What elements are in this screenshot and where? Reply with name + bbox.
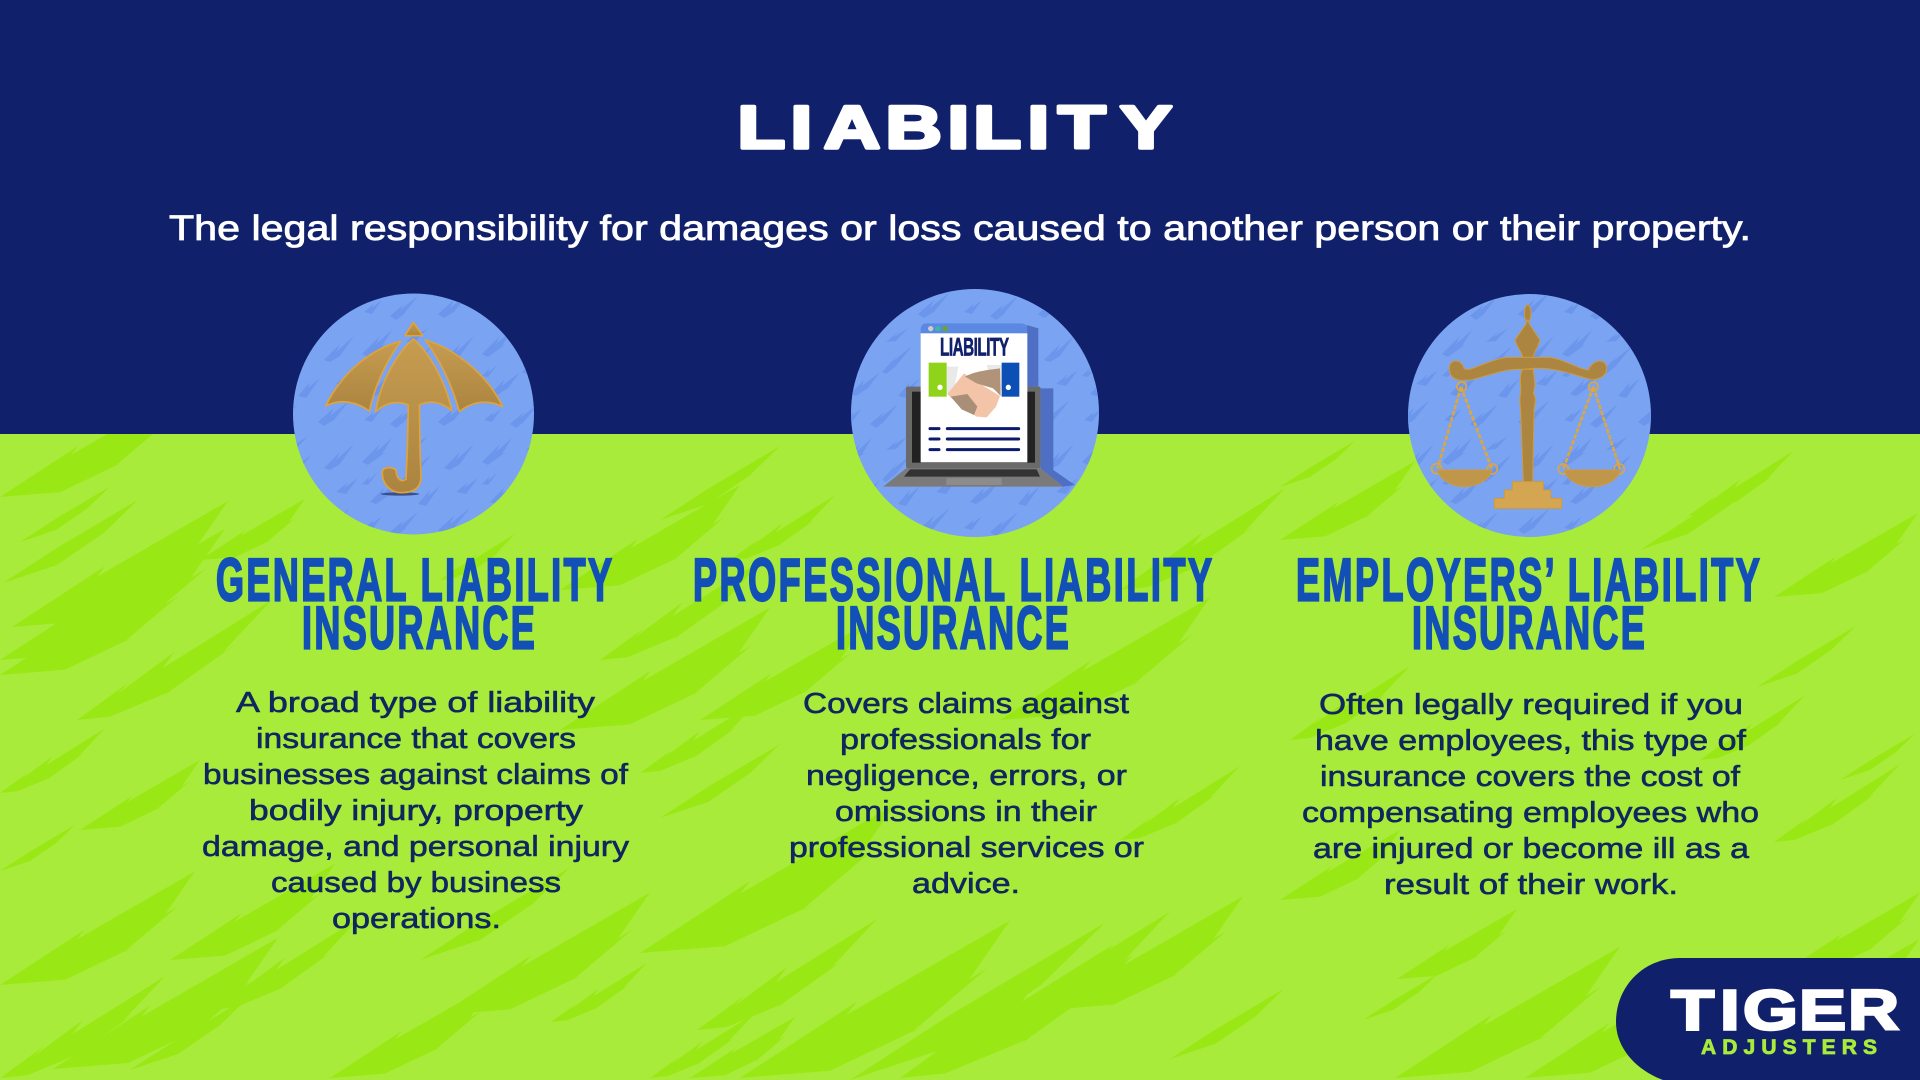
text: professional liability description: negligence, errors, or [806,760,1127,792]
heading: employers liability insurance: INSURANCE [1412,595,1645,662]
text: general liability description: damage, and personal injury [202,831,630,863]
panel: general liability [202,294,630,935]
heading: general liability insurance: GENERAL LIABILITY [216,547,612,614]
text: professional liability description: Covers claims against [803,688,1129,720]
text: employers liability description [1302,689,1759,901]
text: employers liability description: result of their work. [1384,869,1678,901]
text: employers liability description: insurance covers the cost of [1320,761,1741,793]
icon: laptop with liability document: LIABILITY [940,334,1009,362]
text: employers liability description: compensating employees who [1302,797,1759,829]
text: professional liability description: advice. [912,868,1020,900]
text: general liability description: caused by business [271,867,561,899]
logo: Tiger Adjusters: ADJUSTERS [1701,1036,1877,1059]
text: employers liability description: are injured or become ill as a [1313,833,1750,865]
text: general liability description: operations. [332,903,501,935]
title: LIABILITY [737,94,1172,161]
panel: employers liability [1296,294,1760,901]
heading: professional liability insurance: PROFESSIONAL LIABILITY [693,547,1212,614]
text: general liability description [202,687,630,935]
heading: employers liability insurance: EMPLOYERS’ LIABILITY [1296,547,1760,614]
icon: umbrella [293,294,534,534]
heading: general liability insurance [216,547,612,662]
icon: laptop with liability document [851,289,1099,537]
text: professional liability description [789,688,1144,900]
text: general liability description: bodily injury, property [249,795,584,827]
text: employers liability description: have employees, this type of [1315,725,1747,757]
text: employers liability description: Often legally required if you [1319,689,1743,721]
text: general liability description: A broad type of liability [236,687,596,719]
heading: professional liability insurance [693,547,1212,662]
text: professional liability description: professionals for [840,724,1091,756]
icon: scales of justice [1408,294,1651,537]
heading: professional liability insurance: INSURANCE [836,595,1069,662]
panel: professional liability [693,289,1212,900]
navy header band [0,0,1920,434]
subtitle: The legal responsibility for damages or loss caused to another person or their property. [169,209,1751,248]
logo: Tiger Adjusters: TIGER [1671,978,1899,1042]
heading: employers liability insurance [1296,547,1760,662]
text: general liability description: businesses against claims of [203,759,629,791]
logo: Tiger Adjusters [1616,958,1920,1080]
text: professional liability description: omissions in their [835,796,1097,828]
text: professional liability description: professional services or [789,832,1144,864]
text: general liability description: insurance that covers [256,723,576,755]
heading: general liability insurance: INSURANCE [302,595,535,662]
